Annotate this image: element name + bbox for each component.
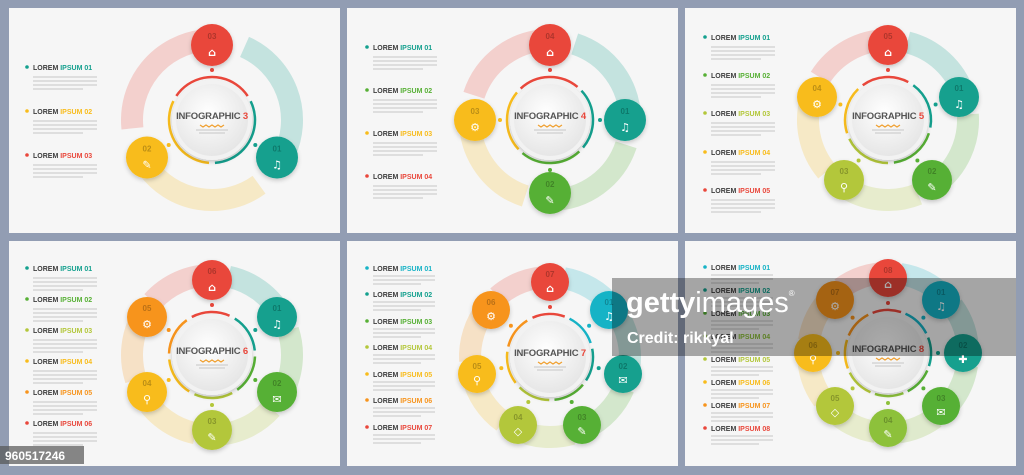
nodes: ♫: [620, 121, 630, 134]
nodes: ⌂: [546, 46, 554, 59]
nodes: ⌂: [884, 46, 892, 59]
watermark: gettyimages: Credit: rikkyal: [627, 330, 734, 347]
nodes: 07: [831, 288, 840, 297]
chart: cycle 6: INFOGRAPHIC 6: [176, 346, 248, 357]
nodes: 01: [621, 107, 630, 116]
nodes: [454, 24, 646, 214]
nodes: ⌂: [546, 282, 554, 295]
list: 4 items: LOREM IPSUM 03: [373, 131, 432, 138]
nodes: ⚙: [470, 121, 480, 134]
nodes: 05: [473, 362, 482, 371]
list: 7 items: [365, 266, 435, 443]
nodes: ♫: [936, 300, 946, 313]
nodes: 01: [273, 144, 282, 154]
list: 4 items: LOREM IPSUM 02: [373, 88, 432, 95]
list: 6 items: LOREM IPSUM 06: [33, 421, 92, 428]
chart: cycle 3: INFOGRAPHIC 3: [176, 111, 248, 122]
list: 3 items: LOREM IPSUM 01: [33, 65, 92, 72]
nodes: ⚙: [486, 310, 496, 323]
watermark: image id: 960517246: [5, 449, 65, 463]
nodes: ✉: [936, 406, 946, 419]
nodes: ✎: [927, 181, 937, 194]
list: 5 items: LOREM IPSUM 03: [711, 111, 770, 118]
nodes: [127, 260, 297, 450]
panel: infographic 4: [347, 8, 678, 233]
nodes: 04: [813, 84, 822, 93]
list: 5 items: LOREM IPSUM 05: [711, 188, 770, 195]
nodes: ◇: [831, 406, 840, 419]
watermark: gettyimages: [612, 278, 1016, 356]
nodes: ✚: [958, 353, 968, 366]
list: 4 items: LOREM IPSUM 01: [373, 45, 432, 52]
nodes: ⚙: [812, 98, 822, 111]
list: 4 items: LOREM IPSUM 04: [373, 174, 432, 181]
nodes: 02: [143, 144, 152, 154]
nodes: 08: [884, 266, 893, 275]
list: 7 items: LOREM IPSUM 06: [373, 398, 432, 405]
nodes: [794, 259, 982, 447]
panel: infographic 3: [9, 8, 340, 233]
chart: cycle 5: [775, 7, 1001, 233]
list: 5 items: LOREM IPSUM 01: [711, 35, 770, 42]
nodes: ⚙: [830, 300, 840, 313]
list: 6 items: LOREM IPSUM 01: [33, 266, 92, 273]
nodes: ⌂: [884, 278, 892, 291]
list: 7 items: LOREM IPSUM 04: [373, 345, 432, 352]
nodes: 03: [578, 413, 587, 422]
list: 7 items: LOREM IPSUM 02: [373, 292, 432, 299]
nodes: 07: [546, 270, 555, 279]
chart: cycle 8: INFOGRAPHIC 8: [852, 344, 924, 355]
nodes: [126, 24, 298, 178]
nodes: ✎: [142, 158, 152, 172]
nodes: ✉: [272, 393, 282, 406]
list: 7 items: LOREM IPSUM 05: [373, 372, 432, 379]
nodes: ♫: [604, 310, 614, 323]
nodes: 02: [546, 180, 555, 189]
watermark: image id: [0, 446, 84, 464]
list: 4 items: [365, 45, 437, 198]
nodes: 03: [471, 107, 480, 116]
nodes: ⚲: [840, 181, 848, 194]
chart: cycle 3: [100, 8, 324, 232]
list: 5 items: LOREM IPSUM 02: [711, 73, 770, 80]
nodes: 06: [208, 267, 217, 276]
nodes: ⚲: [473, 374, 481, 387]
nodes: 06: [487, 298, 496, 307]
panel: infographic 7: [347, 241, 678, 470]
nodes: 05: [884, 32, 893, 41]
list: 6 items: LOREM IPSUM 02: [33, 297, 92, 304]
panel: infographic 5: [685, 7, 1016, 233]
nodes: 04: [143, 379, 152, 388]
chart: cycle 7: INFOGRAPHIC 7: [514, 348, 586, 359]
nodes: ♫: [272, 318, 282, 331]
nodes: 03: [208, 32, 217, 41]
nodes: 03: [208, 417, 217, 426]
nodes: 02: [928, 167, 937, 176]
list: 5 items: LOREM IPSUM 04: [711, 150, 770, 157]
nodes: 03: [840, 167, 849, 176]
list: 8 items: LOREM IPSUM 04: [711, 334, 770, 341]
watermark: gettyimages: ®: [789, 289, 795, 298]
nodes: ✎: [883, 428, 893, 441]
nodes: 05: [143, 304, 152, 313]
nodes: [458, 263, 642, 444]
nodes: 04: [546, 32, 555, 41]
list: 7 items: LOREM IPSUM 03: [373, 319, 432, 326]
nodes: ♫: [272, 158, 282, 172]
panel: infographic 6: [9, 241, 340, 468]
list: 8 items: LOREM IPSUM 06: [711, 380, 770, 387]
list: 7 items: LOREM IPSUM 07: [373, 425, 432, 432]
nodes: ♫: [954, 98, 964, 111]
list: 5 items: [703, 35, 775, 212]
nodes: ✎: [577, 425, 587, 438]
nodes: ✎: [207, 431, 217, 444]
nodes: 04: [884, 416, 893, 425]
list: 7 items: LOREM IPSUM 01: [373, 266, 432, 273]
nodes: 04: [514, 413, 523, 422]
nodes: 02: [619, 362, 628, 371]
nodes: ◇: [514, 425, 523, 438]
nodes: 01: [937, 288, 946, 297]
list: 6 items: LOREM IPSUM 03: [33, 328, 92, 335]
list: 8 items: LOREM IPSUM 08: [711, 426, 770, 433]
nodes: 06: [809, 341, 818, 350]
list: 6 items: [25, 266, 97, 445]
nodes: ⚲: [809, 353, 817, 366]
chart: cycle 6: [99, 242, 325, 468]
chart: cycle 4: [449, 19, 651, 221]
list: 3 items: LOREM IPSUM 02: [33, 109, 92, 116]
nodes: ⌂: [208, 281, 216, 294]
nodes: 01: [955, 84, 964, 93]
nodes: ⚙: [142, 318, 152, 331]
list: 8 items: [703, 265, 773, 444]
list: 8 items: LOREM IPSUM 03: [711, 311, 770, 318]
watermark: gettyimages: gettyimages: [626, 287, 789, 319]
panel: infographic 8: [685, 241, 1016, 466]
nodes: 03: [937, 394, 946, 403]
list: 6 items: LOREM IPSUM 04: [33, 359, 92, 366]
list: 8 items: LOREM IPSUM 05: [711, 357, 770, 364]
list: 8 items: LOREM IPSUM 01: [711, 265, 770, 272]
nodes: ⚲: [143, 393, 151, 406]
chart: cycle 7: [437, 244, 663, 470]
nodes: 02: [273, 379, 282, 388]
list: 6 items: LOREM IPSUM 05: [33, 390, 92, 397]
chart: cycle 8: [776, 241, 1000, 465]
nodes: ✎: [545, 194, 555, 207]
chart: cycle 5: INFOGRAPHIC 5: [852, 111, 925, 122]
nodes: 01: [605, 298, 614, 307]
list: 3 items: [25, 65, 97, 177]
nodes: 05: [831, 394, 840, 403]
nodes: ✉: [618, 374, 628, 387]
nodes: 01: [273, 304, 282, 313]
list: 8 items: LOREM IPSUM 02: [711, 288, 770, 295]
list: 3 items: LOREM IPSUM 03: [33, 153, 92, 160]
chart: cycle 4: INFOGRAPHIC 4: [514, 111, 587, 122]
nodes: [797, 25, 979, 200]
nodes: 02: [959, 341, 968, 350]
list: 8 items: LOREM IPSUM 07: [711, 403, 770, 410]
nodes: ⌂: [208, 46, 216, 59]
